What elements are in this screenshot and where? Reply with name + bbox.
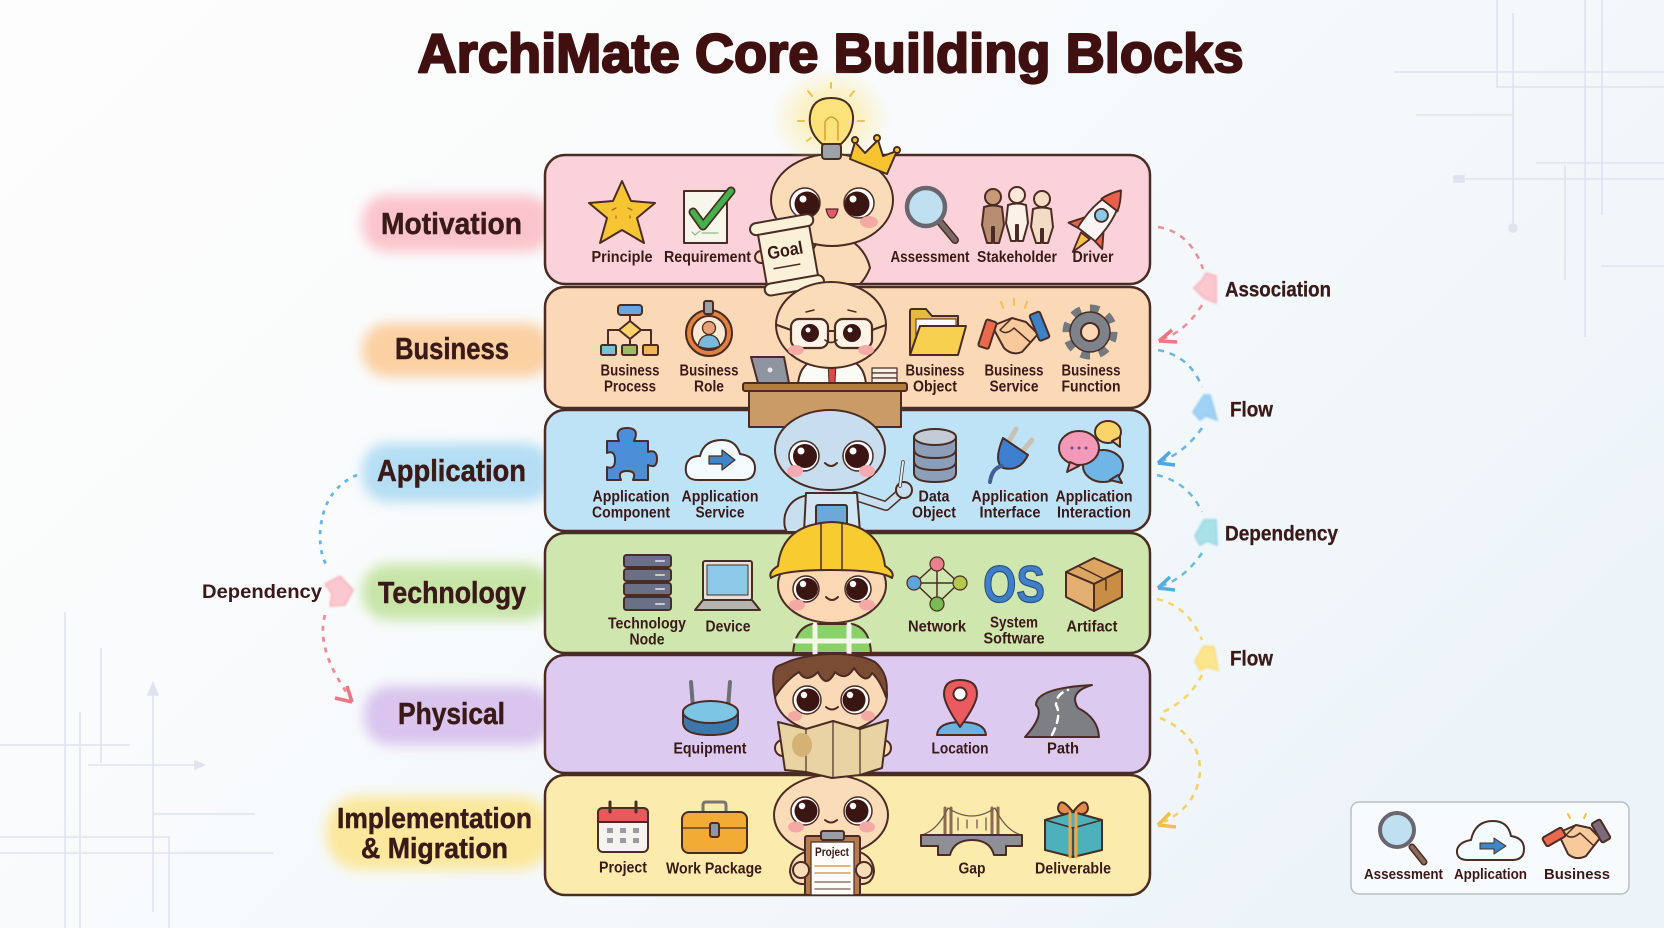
label: Gap: Gap: [958, 860, 986, 878]
relation label: Association: Association: [1225, 278, 1331, 302]
layer label: Implementation & Migration: & Migration: [361, 833, 508, 865]
legend box: [1351, 802, 1629, 894]
label: Artifact: Artifact: [1066, 618, 1118, 636]
label: System Software: Software: [984, 630, 1045, 648]
label: Application Interface: [972, 488, 1048, 522]
legend label: Business: Business: [1544, 866, 1610, 883]
icon: calendar: [598, 802, 648, 852]
layer label: Physical: Physical: [398, 696, 505, 731]
character: business mascot at desk: [743, 282, 907, 427]
label: Data Object: [912, 488, 957, 522]
relation label: Flow: Flow: [1230, 648, 1274, 670]
label: Driver: Driver: [1072, 249, 1114, 266]
arrow: Dependency: [1157, 475, 1217, 590]
layer label: Application: Application: [377, 453, 526, 488]
label: Deliverable: Deliverable: [1035, 860, 1111, 878]
label: Application Interaction: Application: [1056, 488, 1132, 506]
goal scroll: [749, 213, 825, 297]
legend label: Assessment: Assessment: [1364, 866, 1443, 883]
label: Business Function: [1062, 362, 1121, 396]
panel: Physical: [545, 655, 1150, 773]
label: Principle: Principle: [592, 249, 653, 266]
label: Business Object: Object: [913, 378, 958, 396]
layer label: Technology: [362, 564, 552, 620]
icon: business process: [601, 305, 658, 355]
icon: cardboard box: [1066, 558, 1122, 611]
label: System Software: [984, 614, 1045, 648]
layer label: Motivation: Motivation: [381, 206, 522, 241]
layer label: Implementation & Migration: Implementation: [337, 803, 532, 835]
icon: plug: [990, 429, 1032, 482]
label: Application Service: Application: [682, 488, 758, 506]
panel: Technology: [545, 533, 1150, 653]
icon: chat bubbles: [1059, 421, 1123, 483]
label: Stakeholder: Stakeholder: [977, 249, 1057, 266]
icon: OS logo: OS: [983, 556, 1045, 614]
label: Business Function: Function: [1062, 378, 1120, 396]
legend icon: handshake: [1542, 814, 1611, 858]
icon: business role badge: [686, 301, 732, 356]
layer label: Technology: Technology: [378, 575, 527, 610]
icon: gear: [1066, 308, 1114, 356]
character: application robot: [775, 410, 912, 532]
arrow: Association: [1158, 227, 1216, 342]
light bulb: [798, 83, 864, 159]
label: Business Role: [680, 362, 739, 396]
relation label: Flow: Flow: [1230, 398, 1274, 422]
layer label: Motivation: [362, 195, 552, 252]
map: [778, 720, 888, 778]
icon: folder: [910, 309, 966, 355]
label: Business Service: Business: [984, 362, 1044, 380]
arrow: Flow blue: [1158, 350, 1217, 465]
label: Technology Node: Node: [630, 632, 665, 648]
icon: server rack: [624, 555, 671, 610]
label: Work Package: Work Package: [666, 860, 762, 878]
label: Application Component: Application: [592, 488, 670, 506]
label: Business Process: [600, 362, 660, 396]
label: Device: Device: [706, 618, 751, 636]
label: Equipment: Equipment: [674, 740, 747, 758]
character: technology builder with hard hat: [770, 522, 893, 653]
title: ArchiMate Core Building Blocks: [418, 22, 1244, 84]
character: implementation mascot with clipboard: [774, 775, 888, 895]
panel: Implementation & Migration: [545, 775, 1150, 895]
icon: location pin: [937, 680, 986, 735]
crown: [850, 135, 900, 174]
label: Technology Node: Technology: [608, 616, 686, 632]
arrow: Flow yellow: [1157, 599, 1218, 713]
label: Business Service: Service: [990, 378, 1039, 396]
layer label: Application: [362, 443, 552, 502]
layer label: Business: [362, 323, 552, 377]
panel: Motivation: [545, 155, 1150, 284]
layer label: Physical: [364, 686, 552, 745]
icon: winding road: [1025, 685, 1099, 737]
goal scroll: Goal: [766, 237, 805, 263]
icon: laptop: [695, 561, 760, 610]
label: Business Process: Business: [600, 362, 660, 380]
layer label: Implementation & Migration: [326, 796, 552, 870]
stacked books: [872, 368, 897, 383]
character: physical explorer with map: [773, 654, 891, 778]
arrow: left Dependency: [320, 475, 357, 702]
icon: requirement check: [684, 191, 731, 243]
icon: toolbox: [682, 802, 747, 853]
relation label: left Dependency: Dependency: [202, 582, 322, 603]
label: Application Interaction: [1056, 488, 1132, 522]
arrow: Flow to Implementation: [1158, 718, 1200, 827]
icon: cloud service: [686, 440, 755, 480]
desk: [743, 383, 907, 427]
label: Application Interface: Application: [972, 488, 1048, 506]
laptop on desk: [751, 357, 789, 383]
icon: star: [589, 181, 655, 243]
label: Application Interaction: Interaction: [1057, 504, 1131, 522]
label: Business Role: Role: [694, 378, 724, 396]
label: Technology Node: [608, 616, 686, 648]
clipboard: Project: [815, 845, 849, 859]
legend icon: magnifier: [1380, 813, 1424, 862]
label: System Software: System: [990, 614, 1038, 632]
label: Assessment: Assessment: [890, 249, 970, 266]
icon: network nodes: [907, 557, 967, 611]
legend label: Application: Application: [1454, 866, 1527, 883]
icon: bridge: [921, 808, 1022, 855]
label: Requirement: Requirement: [664, 249, 752, 266]
label: Business Function: Business: [1062, 362, 1121, 380]
legend icon: cloud: [1457, 821, 1524, 860]
label: Business Process: Process: [604, 378, 656, 396]
layer label: Business: Business: [395, 331, 509, 366]
relation label: Dependency: Dependency: [1225, 522, 1338, 546]
icon: magnifier: [907, 188, 955, 240]
eyes: [790, 188, 874, 218]
label: Data Object: Data: [918, 488, 950, 506]
label: Location: Location: [932, 740, 988, 758]
label: Project: Project: [599, 860, 648, 876]
icon: router: [683, 682, 738, 735]
panel: Business: [545, 287, 1150, 408]
icon: puzzle piece: [607, 428, 657, 480]
label: Business Role: Business: [680, 362, 739, 380]
panel: Application: [545, 410, 1150, 531]
label: Path: Path: [1047, 740, 1079, 758]
label: Application Component: Component: [592, 504, 671, 522]
label: Business Object: [906, 362, 965, 396]
layer labels: [326, 195, 552, 870]
label: Application Service: Service: [696, 504, 745, 522]
icon: gift box: [1045, 802, 1102, 857]
icon: rocket: [1056, 177, 1138, 265]
icon: stakeholders: [982, 187, 1053, 243]
label: Application Component: [592, 488, 671, 522]
label: Business Service: [984, 362, 1044, 396]
label: Network: Network: [908, 618, 966, 636]
label: Application Interface: Interface: [980, 504, 1041, 522]
label: Business Object: Business: [906, 362, 965, 380]
icon: handshake: [978, 299, 1050, 353]
icon: database: [914, 429, 956, 482]
label: Application Service: [682, 488, 758, 522]
label: Data Object: Object: [912, 504, 957, 522]
character: motivation mascot with bulb, crown and goal scroll: [749, 68, 900, 297]
